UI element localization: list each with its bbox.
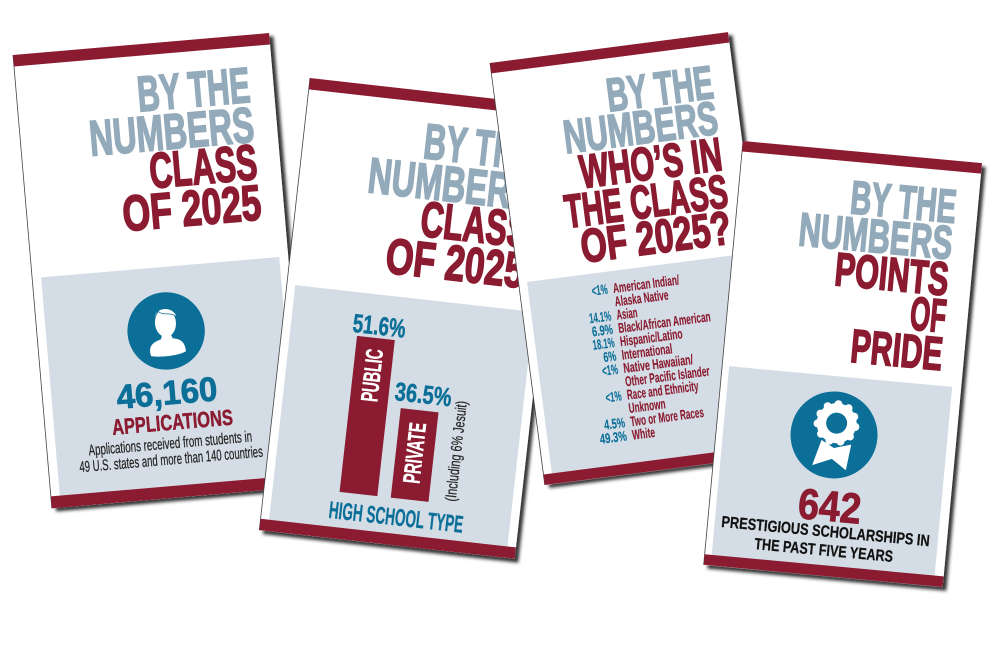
description: scholarships xyxy=(719,514,930,569)
list: race and ethnicity: <1% xyxy=(601,361,619,379)
top bar xyxy=(13,33,270,66)
label: high school type: HIGH SCHOOL TYPE xyxy=(327,497,465,539)
heading: by the numbers: NUMBERS xyxy=(560,91,721,163)
gray panel xyxy=(41,257,298,496)
heading: by the numbers xyxy=(84,57,256,167)
description: Applications received from students in xyxy=(88,429,253,459)
bar chart: school type: (Including 6% Jesuit) xyxy=(443,400,471,502)
heading: points of pride: PRIDE xyxy=(849,319,945,380)
bottom bar xyxy=(543,444,783,485)
stat: 46,160: 46,160 xyxy=(115,370,219,417)
list: race and ethnicity: Asian xyxy=(615,304,638,323)
list: race and ethnicity: Alaska Native xyxy=(614,287,669,309)
list: race and ethnicity: Native Hawaiian/ xyxy=(622,351,694,376)
bar chart: school type: 51.6% xyxy=(351,308,407,344)
heading: by the numbers: BY THE xyxy=(603,55,716,122)
icon: ribbon award xyxy=(787,388,881,482)
description: 49 U.S. states and more than 140 countries xyxy=(79,444,264,476)
top bar xyxy=(742,141,982,174)
heading: by the numbers: BY THE xyxy=(135,57,252,122)
panel: card 1 applications xyxy=(13,33,308,508)
label: applications: APPLICATIONS xyxy=(111,405,234,440)
heading: class of 2025: CLASS xyxy=(147,134,259,199)
list: race and ethnicity: 4.5% xyxy=(603,414,626,433)
list: race and ethnicity: Race and Ethnicity xyxy=(626,378,699,403)
heading: by the numbers xyxy=(797,166,959,269)
heading: by the numbers: NUMBERS xyxy=(87,97,256,167)
list: race and ethnicity: <1% xyxy=(591,281,609,299)
panel: card 3 who's in the class xyxy=(490,32,783,485)
list: race and ethnicity: White xyxy=(631,424,656,443)
heading: class of 2025: OF 2025 xyxy=(120,174,263,242)
list: race and ethnicity: 49.3% xyxy=(599,428,628,447)
description: scholarships: PRESTIGIOUS SCHOLARSHIPS IN xyxy=(721,514,930,550)
list: race and ethnicity: Other Pacific Islander xyxy=(624,363,711,389)
stat: 642: 642 xyxy=(796,480,863,534)
bar chart: school type: PRIVATE xyxy=(399,421,432,485)
list: race and ethnicity: American Indian/ xyxy=(612,272,680,296)
list: race and ethnicity: Unknown xyxy=(628,395,666,416)
icon: person xyxy=(124,289,208,373)
description: scholarships: THE PAST FIVE YEARS xyxy=(754,536,894,566)
heading: class of 2025 xyxy=(117,134,263,242)
list: race and ethnicity: 18.1% xyxy=(592,334,616,353)
heading: who's in the class of 2025: WHO’S IN xyxy=(576,127,725,198)
top bar xyxy=(309,78,565,118)
heading: who's in the class of 2025: THE CLASS xyxy=(561,164,731,238)
bar chart: school type xyxy=(334,308,480,505)
heading: class of 2025: OF 2025 xyxy=(383,228,527,299)
list: race and ethnicity: Hispanic/Latino xyxy=(619,325,683,349)
bottom bar xyxy=(51,474,308,508)
heading: class of 2025: CLASS xyxy=(418,191,531,259)
top bar xyxy=(490,32,729,73)
panel: card 4 points of pride xyxy=(704,141,982,587)
bar chart: school type: PUBLIC xyxy=(356,348,389,403)
heading: class of 2025 xyxy=(383,188,532,299)
list: race and ethnicity: International xyxy=(621,340,673,363)
list: race and ethnicity: Two or More Races xyxy=(629,404,705,429)
list: race and ethnicity xyxy=(580,268,725,447)
bar chart: school type: 36.5% xyxy=(393,376,453,412)
heading: who's in the class of 2025 xyxy=(557,127,736,274)
heading: points of pride xyxy=(826,242,952,380)
heading: by the numbers: NUMBERS xyxy=(365,147,536,221)
panel: card 2 high school type xyxy=(259,78,565,559)
description xyxy=(77,428,264,476)
gray panel xyxy=(269,285,534,546)
bottom bar xyxy=(259,519,516,559)
list: race and ethnicity: <1% xyxy=(605,387,623,405)
list: race and ethnicity: 14.1% xyxy=(588,308,612,326)
list: race and ethnicity: Black/African American xyxy=(617,308,711,336)
bottom bar xyxy=(704,554,944,587)
gray panel xyxy=(527,253,773,473)
heading: by the numbers xyxy=(365,108,540,221)
gray panel xyxy=(712,366,952,576)
list: race and ethnicity: 6.9% xyxy=(591,321,614,339)
heading: who's in the class of 2025: OF 2025? xyxy=(577,201,734,273)
heading: by the numbers xyxy=(556,55,721,163)
list: race and ethnicity: 6% xyxy=(602,348,618,365)
heading: points of pride: OF xyxy=(908,286,949,342)
heading: by the numbers: BY THE xyxy=(421,113,540,182)
